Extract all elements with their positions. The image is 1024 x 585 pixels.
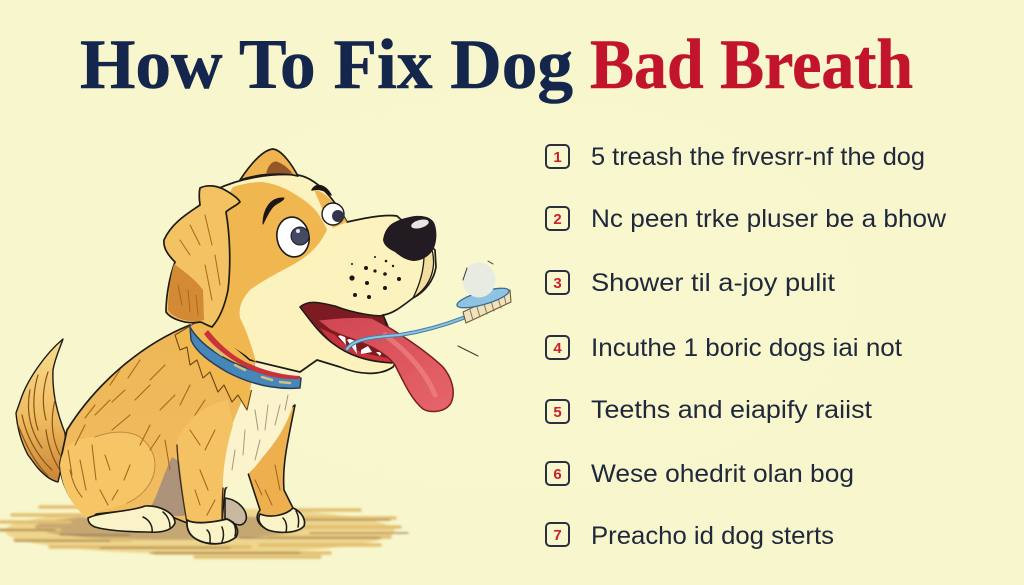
far lip (413, 250, 434, 298)
title: How To Fix Dog (80, 26, 573, 104)
item 3: Shower til a-joy pulit (591, 269, 835, 297)
far front paw (225, 498, 246, 525)
title: Bad Breath (590, 26, 913, 104)
item 5: Teeths and eiapify raiist (591, 396, 872, 424)
back ear (240, 149, 298, 180)
illustration: dog with toothbrush (0, 149, 511, 557)
body (60, 325, 292, 523)
right front paw (259, 508, 305, 532)
item 4: 4 (553, 340, 562, 357)
tan patch near far eye (314, 190, 347, 228)
item 5: 5 (553, 404, 562, 421)
item 6: 6 (553, 466, 562, 483)
toes (143, 511, 299, 543)
body fur strokes (68, 360, 280, 515)
collar (190, 327, 301, 388)
head (205, 175, 436, 373)
front leg edge (177, 445, 223, 523)
belly shadow (150, 457, 187, 516)
toothbrush (347, 262, 511, 349)
tail (16, 339, 66, 482)
nose (383, 216, 436, 261)
item 4: Incuthe 1 boric dogs iai not (591, 334, 902, 362)
item 2: 2 (553, 211, 562, 228)
brush head (455, 284, 511, 312)
eye large (274, 215, 312, 259)
front leg (177, 400, 237, 541)
front paw (187, 519, 238, 544)
item 1: 1 (553, 149, 562, 166)
eyebrow large (263, 198, 284, 224)
tail fur (18, 372, 60, 476)
eyebrow small (312, 186, 331, 195)
title (80, 26, 913, 104)
hind leg outline (95, 432, 155, 503)
neck mane (175, 320, 258, 410)
item 1: 5 treash the frvesrr-nf the dog (591, 143, 925, 171)
item 6: Wese ohedrit olan bog (591, 460, 854, 488)
ear shadow (168, 264, 204, 321)
tongue (317, 317, 453, 411)
eye small (322, 203, 344, 225)
toothpaste (462, 262, 496, 298)
ground shadow (0, 507, 408, 557)
chest (223, 385, 297, 488)
mouth (300, 302, 392, 363)
front ear (164, 186, 240, 327)
bristles (463, 290, 511, 323)
head tan patch (207, 182, 327, 362)
motion lines (458, 261, 493, 356)
tongue highlight (385, 335, 435, 395)
right front leg (247, 405, 305, 532)
item 3: 3 (553, 275, 562, 292)
list of tips (546, 143, 947, 550)
neck cream (250, 348, 310, 392)
item 7: 7 (553, 527, 562, 544)
item 7: Preacho id dog sterts (591, 522, 834, 550)
whisker spots (349, 256, 401, 299)
back ear inner (266, 162, 293, 174)
hind foot (88, 506, 175, 532)
hind leg (60, 432, 155, 520)
item 2: Nc peen trke pluser be a bhow (591, 205, 947, 233)
teeth (338, 334, 382, 356)
